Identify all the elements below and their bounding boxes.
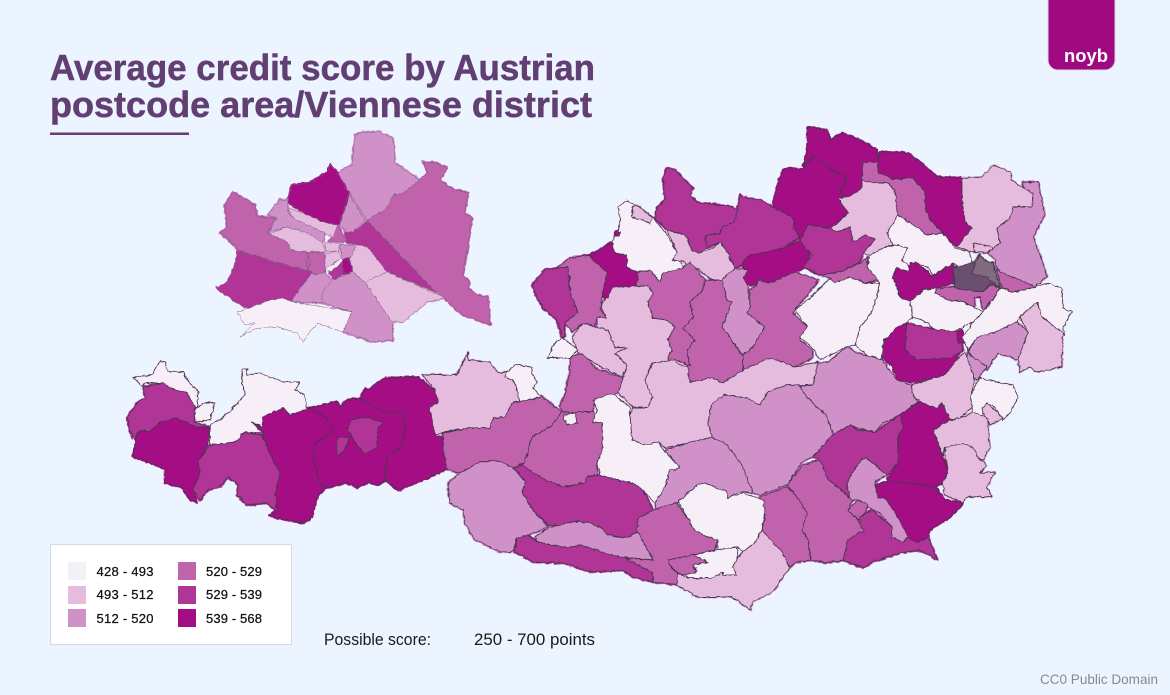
- title: Average credit score by Austrian: [50, 47, 595, 88]
- legend item: 493 - 512: [68, 586, 154, 604]
- possible score note: [324, 631, 595, 649]
- region: Salzburg: [422, 337, 623, 487]
- title underline: [50, 132, 189, 135]
- logo: noyb: noyb: [1064, 46, 1108, 66]
- credit: CC0 Public Domain: [1040, 671, 1158, 687]
- possible score note: Possible score:: [324, 631, 431, 649]
- legend item: 512 - 520: [68, 609, 154, 627]
- region: Styria: [593, 347, 995, 610]
- legend item: 512 - 520: 512 - 520: [96, 611, 154, 626]
- legend: [50, 544, 292, 644]
- title: postcode area/Viennese district: [50, 84, 592, 125]
- legend item: 428 - 493: [68, 562, 154, 580]
- logo: noyb: [1048, 0, 1115, 70]
- map: Vienna districts inset: [217, 132, 490, 342]
- legend item: 520 - 529: 520 - 529: [206, 564, 262, 579]
- region: Carinthia: [448, 460, 765, 585]
- region: Vorarlberg: [127, 361, 215, 502]
- legend item: 428 - 493: 428 - 493: [96, 564, 154, 579]
- region: Tyrol: [193, 368, 448, 523]
- legend item: 539 - 568: [178, 609, 262, 627]
- legend item: 520 - 529: [178, 562, 262, 580]
- possible score note: 250 - 700 points: [474, 631, 595, 649]
- legend item: 539 - 568: 539 - 568: [206, 611, 262, 626]
- legend item: 529 - 539: 529 - 539: [206, 587, 262, 602]
- map: Austria postcode areas: [127, 127, 1072, 610]
- legend item: 493 - 512: 493 - 512: [96, 587, 154, 602]
- legend item: 529 - 539: [178, 586, 262, 604]
- title: [50, 47, 595, 125]
- region: Upper Austria: [532, 168, 818, 408]
- region: Vienna highlighted on the map: [953, 255, 1000, 292]
- region: Burgenland: [967, 302, 1063, 425]
- region: Lower Austria: [773, 127, 1072, 383]
